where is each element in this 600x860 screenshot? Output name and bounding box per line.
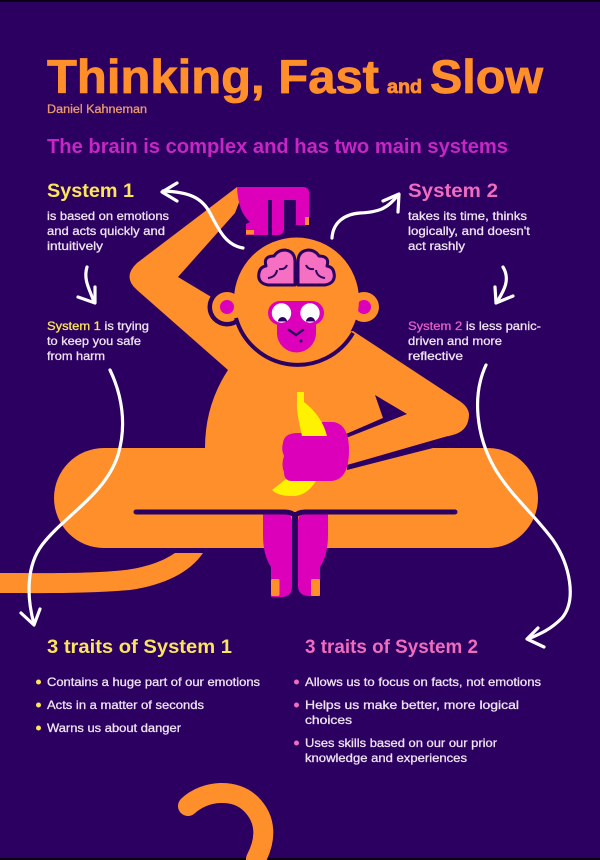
System 1 safety note: System 1 is trying [47,319,149,333]
traits list 1: Contains a huge part of our emotions [47,675,260,689]
subtitle: The brain is complex and has two main systems [47,136,508,158]
tail at bottom of page [188,793,263,859]
traits list 2: Helps us make better, more logical [305,698,519,712]
System 1 safety note: from harm [47,349,105,363]
System 2 description [408,209,531,253]
System 1 safety note: to keep you safe [47,334,141,348]
traits heading 1: 3 traits of System 1 [47,637,232,658]
title: Slow [430,50,543,103]
traits list 2: Uses skills based on our our prior [305,736,497,750]
System 2 reflection note: reflective [408,349,463,363]
panel: traits of System 1 [36,637,260,735]
monkey crossed legs [54,448,538,548]
hand on head [237,187,309,235]
System 2 reflection note [408,319,541,363]
panel: traits of System 2 [294,637,541,765]
brain [259,250,334,285]
muzzle and face [268,301,324,352]
lap crease line [136,512,455,516]
feet [263,512,328,597]
System 1 safety note [47,319,149,363]
traits list 2 [294,675,541,765]
traits list 1: Warns us about danger [47,721,181,735]
arrow: to traits of System 1 [21,370,123,625]
title: Thinking, Fast [47,50,379,103]
monkey tail lower left [0,553,203,593]
author: Daniel Kahneman [47,104,147,116]
right ear [349,292,379,322]
System 1 description: and acts quickly and [47,224,165,238]
banana lower end [272,478,316,496]
left ear [208,288,246,326]
traits list 1: Acts in a matter of seconds [47,698,204,712]
arrow: to traits of System 2 [478,365,570,647]
System 1 text block [47,181,169,363]
System 2 description: logically, and doesn't [408,224,531,238]
traits list 1 [36,675,260,735]
monkey body and arms [130,187,469,470]
System 2 reflection note: System 2 is less panic- [408,319,541,333]
hand holding banana [282,422,349,481]
System 2 description: act rashly [408,239,465,253]
System 1 heading: System 1 [47,181,134,202]
System 1 description [47,209,169,253]
arrow: head to System 1 [162,183,243,248]
illustration: monkey eating a banana [0,187,538,597]
traits list 2: knowledge and experiences [305,751,467,765]
traits list 2: choices [305,713,352,727]
System 2 reflection note: driven and more [408,334,502,348]
arrow: System 2 description down [495,267,513,303]
banana upper end [297,392,327,436]
chin outline [236,318,353,365]
System 1 description: intuitively [47,239,103,253]
System 2 heading: System 2 [408,181,498,202]
traits heading 2: 3 traits of System 2 [305,637,478,658]
System 1 description: is based on emotions [47,209,169,223]
System 2 text block [408,181,541,363]
forearm gap [346,395,448,470]
arrow: head to System 2 [332,194,399,238]
title: and [387,77,422,98]
monkey head [208,238,379,365]
traits list 2: Allows us to focus on facts, not emotions [305,675,541,689]
arrow: System 1 description down [78,267,95,303]
System 2 description: takes its time, thinks [408,209,527,223]
